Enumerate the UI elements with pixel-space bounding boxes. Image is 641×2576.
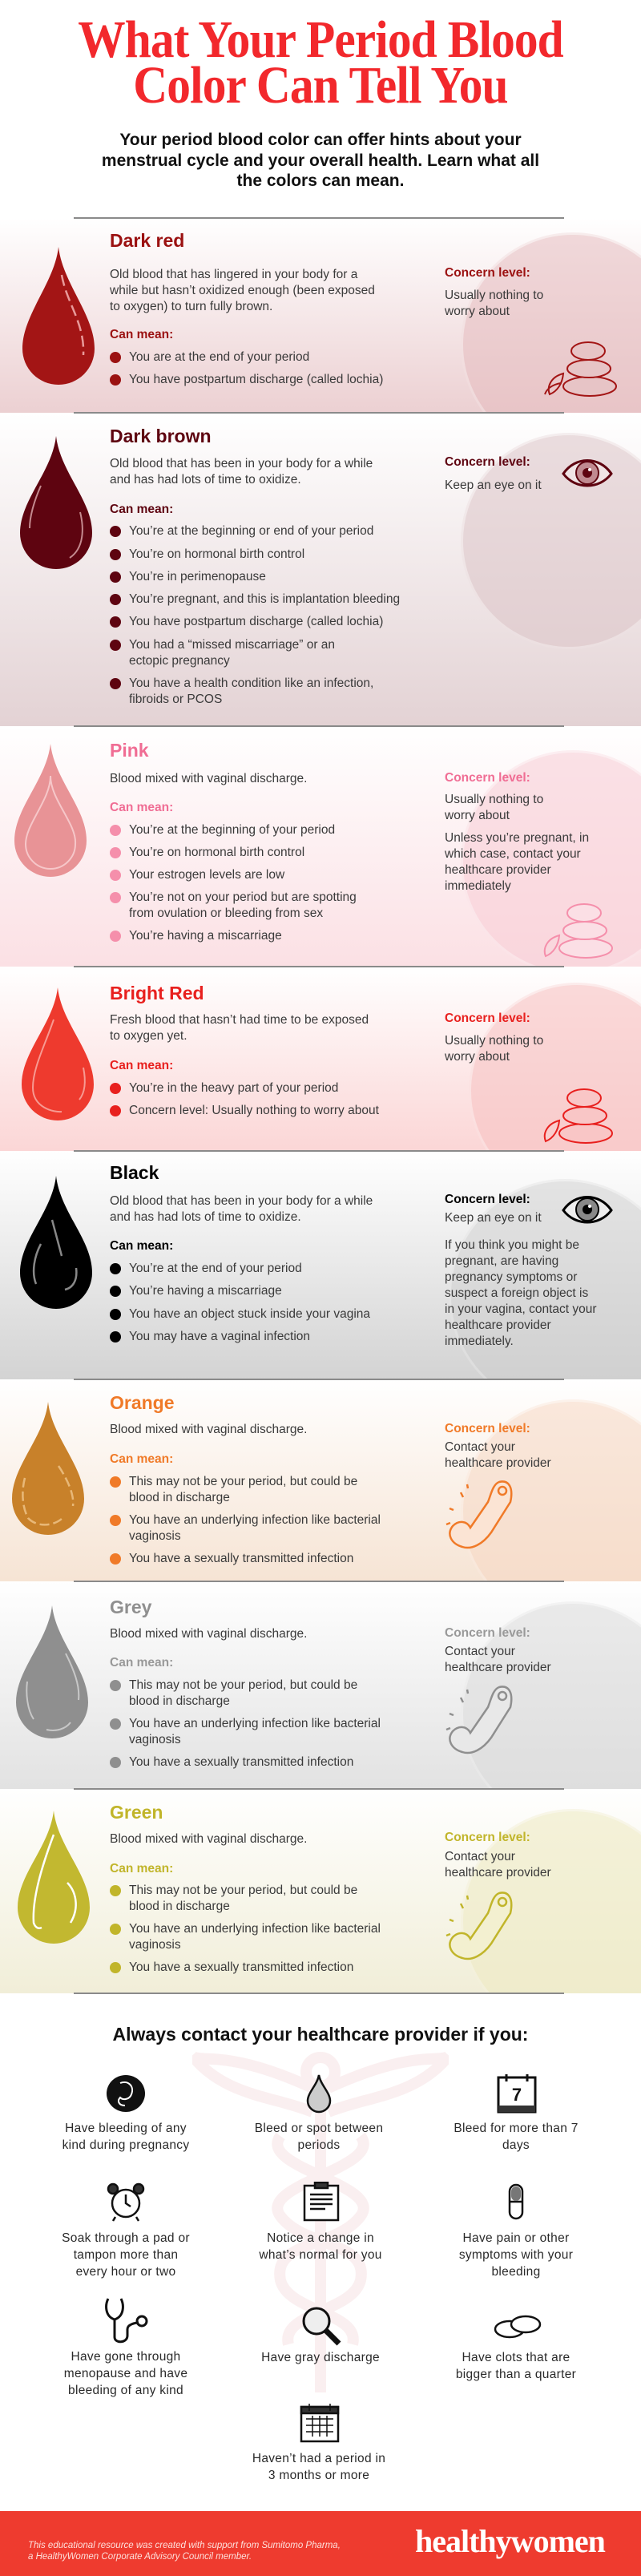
item: bleeding during pregnancy: Have bleeding of any: [65, 2122, 187, 2135]
item: clots: bigger than a quarter: [456, 2368, 576, 2381]
can mean list: Can mean:: [110, 1239, 173, 1253]
panel: bright red: [0, 967, 641, 1151]
icon: eye: [562, 1196, 613, 1223]
heading: Orange: [110, 1392, 175, 1413]
item: soak through pad: tampon more than: [74, 2248, 178, 2262]
subtitle: [102, 131, 539, 190]
concern level: Concern level:: [445, 266, 530, 280]
can mean list: You’re at the beginning or end of your period: [129, 524, 373, 538]
heading: Grey: [110, 1597, 151, 1617]
concern level: Concern level:: [445, 1831, 530, 1844]
description: Blood mixed with vaginal discharge.: [110, 772, 307, 785]
can mean list: blood in discharge: [129, 1900, 230, 1913]
item: gray discharge: Have gray discharge: [261, 2351, 380, 2364]
can mean list: You’re having a miscarriage: [129, 929, 282, 943]
can mean list: blood in discharge: [129, 1694, 230, 1708]
can mean list: [110, 503, 400, 706]
can mean list: fibroids or PCOS: [129, 692, 222, 706]
can mean list: This may not be your period, but could be: [129, 1475, 357, 1488]
title: Color Can Tell You: [133, 56, 508, 115]
can mean list: This may not be your period, but could be: [129, 1678, 357, 1692]
concern level: [445, 455, 613, 492]
can mean list: You have a sexually transmitted infection: [129, 1960, 353, 1974]
panel: green: [0, 1789, 641, 1993]
concern level: [445, 266, 543, 318]
description: Blood mixed with vaginal discharge.: [110, 1627, 307, 1641]
item: no period 3 months: [223, 2403, 415, 2483]
concern level: in your vagina, contact your: [445, 1302, 597, 1316]
icon: calendar 7: 7: [512, 2085, 522, 2105]
panel: orange: [0, 1379, 641, 1581]
item: menopause: Have gone through: [71, 2350, 180, 2364]
panel: dark brown: [0, 413, 641, 726]
concern level: Usually nothing to: [445, 1034, 543, 1048]
concern level: worry about: [445, 809, 510, 822]
concern level: Usually nothing to: [445, 289, 543, 302]
concern level: [445, 1831, 551, 1880]
icon: pill: [508, 2183, 524, 2220]
description: to oxygen yet.: [110, 1029, 187, 1043]
panel: grey: [0, 1581, 641, 1789]
concern level: Usually nothing to: [445, 793, 543, 806]
can mean list: You have a sexually transmitted infection: [129, 1755, 353, 1769]
item: soak through pad: Soak through a pad or: [62, 2231, 190, 2245]
item: pain or symptoms: bleeding: [491, 2265, 540, 2279]
can mean list: You have postpartum discharge (called lochia): [129, 373, 383, 386]
concern level: healthcare provider: [445, 1456, 551, 1470]
can mean list: vaginosis: [129, 1733, 181, 1746]
item: notice a change: [224, 2182, 417, 2262]
can mean list: Can mean:: [110, 1862, 173, 1875]
can mean list: Concern level: Usually nothing to worry about: [129, 1104, 379, 1117]
can mean list: You have postpartum discharge (called lochia): [129, 615, 383, 628]
icon: phone: [445, 1480, 513, 1548]
item: no period 3 months: 3 months or more: [268, 2469, 369, 2482]
concern level: [445, 1422, 551, 1470]
can mean list: You have an underlying infection like bacterial: [129, 1717, 381, 1730]
can mean list: Can mean:: [110, 503, 173, 516]
description: Old blood that has lingered in your body for a: [110, 268, 357, 281]
can mean list: Can mean:: [110, 1452, 173, 1466]
concern level: Contact your: [445, 1440, 515, 1454]
drop: dark red: [22, 247, 95, 385]
panel: black: [0, 1151, 641, 1379]
heading: Dark brown: [110, 426, 212, 446]
watermark: caduceus: [192, 2052, 449, 2392]
footer: [0, 2511, 641, 2576]
title: What Your Period Blood: [78, 10, 563, 69]
can mean list: You have an object stuck inside your vagina: [129, 1307, 370, 1321]
can mean list: [110, 1059, 379, 1117]
can mean list: You have a sexually transmitted infection: [129, 1552, 353, 1565]
icon: stones: [543, 1088, 613, 1144]
icon: stethoscope: [103, 2297, 148, 2345]
item: pain or symptoms: symptoms with your: [459, 2248, 573, 2262]
drop: bright red: [22, 987, 94, 1120]
icon: coins: [494, 2313, 542, 2340]
can mean list: [110, 1656, 381, 1769]
panel: pink: [0, 726, 641, 967]
can mean list: blood in discharge: [129, 1491, 230, 1504]
item: clots: [420, 2313, 612, 2377]
concern level: healthcare provider: [445, 1866, 551, 1880]
icon: eye: [562, 459, 613, 487]
can mean list: You’re pregnant, and this is implantation bleeding: [129, 592, 400, 606]
item: pain or symptoms: [420, 2182, 612, 2278]
concern level: pregnancy symptoms or: [445, 1270, 577, 1284]
can mean list: You’re on hormonal birth control: [129, 846, 304, 859]
icon: magnifier: [300, 2305, 342, 2347]
description: [110, 1194, 373, 1224]
drop: pink: [14, 744, 87, 877]
can mean list: Can mean:: [110, 801, 173, 814]
can mean list: Can mean:: [110, 1059, 173, 1072]
title: [78, 10, 563, 115]
item: pain or symptoms: Have pain or other: [463, 2231, 569, 2245]
concern level: Concern level:: [445, 455, 530, 469]
icon: stones: [544, 341, 617, 397]
item: menopause: bleeding of any kind: [68, 2384, 183, 2397]
concern level: [445, 1011, 543, 1064]
concern level: Keep an eye on it: [445, 1211, 542, 1225]
can mean list: You have an underlying infection like bacterial: [129, 1513, 381, 1527]
description: Old blood that has been in your body for a while: [110, 1194, 373, 1208]
concern level: [445, 1193, 613, 1348]
concern level: Concern level:: [445, 1422, 530, 1435]
drop: black: [20, 1176, 92, 1309]
drop: grey: [16, 1606, 88, 1738]
heading: Dark red: [110, 230, 184, 251]
concern level: Contact your: [445, 1645, 515, 1658]
description: [110, 457, 373, 487]
description: Blood mixed with vaginal discharge.: [110, 1423, 307, 1436]
can mean list: You’re in the heavy part of your period: [129, 1081, 338, 1095]
description: and has had lots of time to oxidize.: [110, 473, 301, 487]
item: menopause: menopause and have: [64, 2367, 187, 2380]
icon: stones: [543, 903, 613, 959]
description: and has had lots of time to oxidize.: [110, 1210, 301, 1224]
can mean list: You’re having a miscarriage: [129, 1284, 282, 1298]
footer note: a HealthyWomen Corporate Advisory Council member.: [28, 2552, 252, 2562]
heading: Green: [110, 1802, 163, 1823]
concern level: Keep an eye on it: [445, 478, 542, 492]
concern level: If you think you might be: [445, 1238, 579, 1252]
item: menopause: [30, 2297, 222, 2401]
description: Fresh blood that hasn’t had time to be exposed: [110, 1013, 369, 1027]
can mean list: [110, 1239, 370, 1343]
can mean list: from ovulation or bleeding from sex: [129, 906, 323, 920]
subtitle: Your period blood color can offer hints about your: [119, 131, 522, 149]
can mean list: You’re on hormonal birth control: [129, 547, 304, 561]
heading: always contact: Always contact your healthcare provider if you:: [113, 2024, 528, 2045]
concern level: Contact your: [445, 1850, 515, 1863]
icon: drop: [306, 2073, 332, 2114]
can mean list: You have an underlying infection like bacterial: [129, 1922, 381, 1936]
can mean list: [110, 1862, 381, 1974]
icon: clipboard: [303, 2182, 340, 2222]
item: notice a change: Notice a change in: [267, 2231, 374, 2245]
can mean list: You are at the end of your period: [129, 350, 309, 364]
can mean list: You have a health condition like an infection,: [129, 676, 373, 690]
can mean list: You may have a vaginal infection: [129, 1330, 310, 1343]
can mean list: You’re in perimenopause: [129, 570, 266, 583]
item: clots: Have clots that are: [462, 2351, 570, 2364]
concern level: which case, contact your: [445, 847, 581, 861]
concern level: immediately: [445, 879, 511, 893]
panel: dark red: [0, 218, 641, 413]
footer note: This educational resource was created with support from Sumitomo Pharma,: [28, 2541, 341, 2550]
can mean list: You’re at the beginning of your period: [129, 823, 335, 837]
concern level: suspect a foreign object is: [445, 1286, 588, 1300]
can mean list: Can mean:: [110, 1656, 173, 1670]
concern level: [445, 771, 589, 893]
concern level: Concern level:: [445, 1011, 530, 1025]
description: [110, 268, 375, 313]
icon: calendar 7: [497, 2073, 537, 2114]
concern level: pregnant, are having: [445, 1254, 558, 1268]
can mean list: [110, 1452, 381, 1565]
concern level: Concern level:: [445, 771, 530, 785]
concern level: healthcare provider: [445, 863, 551, 877]
concern level: worry about: [445, 1050, 510, 1064]
can mean list: vaginosis: [129, 1938, 181, 1952]
concern level: Concern level:: [445, 1626, 530, 1640]
item: bleed between periods: [223, 2073, 415, 2154]
heading: Black: [110, 1162, 159, 1183]
concern level: worry about: [445, 305, 510, 318]
can mean list: [110, 801, 357, 943]
can mean list: Can mean:: [110, 328, 173, 341]
description: Blood mixed with vaginal discharge.: [110, 1832, 307, 1846]
item: more than 7 days: Bleed for more than 7: [454, 2122, 579, 2135]
icon: calendar grid: [300, 2403, 340, 2443]
heading: Bright Red: [110, 983, 204, 1003]
drop: orange: [12, 1402, 84, 1535]
subtitle: the colors can mean.: [237, 172, 404, 190]
drop: green: [18, 1811, 90, 1944]
icon: fetus: [106, 2073, 146, 2114]
concern level: [445, 1626, 551, 1674]
logo: healthywomen: [415, 2523, 605, 2559]
subtitle: menstrual cycle and your overall health. Learn what all: [102, 151, 539, 170]
item: notice a change: what’s normal for you: [259, 2248, 382, 2262]
can mean list: ectopic pregnancy: [129, 654, 230, 668]
description: [110, 1013, 369, 1043]
concern level: immediately.: [445, 1334, 514, 1348]
item: more than 7 days: days: [502, 2138, 530, 2152]
can mean list: [110, 328, 383, 386]
can mean list: This may not be your period, but could be: [129, 1884, 357, 1897]
concern level: Unless you’re pregnant, in: [445, 831, 589, 845]
can mean list: You’re not on your period but are spotting: [129, 890, 357, 904]
item: bleed between periods: Bleed or spot between: [255, 2122, 383, 2135]
item: no period 3 months: Haven’t had a period in: [252, 2452, 385, 2465]
heading: Pink: [110, 740, 149, 761]
item: bleed between periods: periods: [298, 2138, 340, 2152]
item: bleeding during pregnancy: [62, 2075, 189, 2152]
icon: phone: [445, 1686, 513, 1754]
can mean list: vaginosis: [129, 1529, 181, 1543]
item: soak through pad: every hour or two: [76, 2265, 175, 2279]
can mean list: Your estrogen levels are low: [129, 868, 284, 882]
description: to oxygen) to turn fully brown.: [110, 300, 272, 313]
concern level: healthcare provider: [445, 1318, 551, 1332]
description: while but hasn’t oxidized enough (been exposed: [110, 284, 375, 297]
description: Old blood that has been in your body for a while: [110, 457, 373, 470]
can mean list: You had a “missed miscarriage” or an: [129, 638, 335, 652]
item: more than 7 days: [420, 2073, 612, 2154]
drop: dark brown: [20, 436, 92, 569]
footer note: [28, 2540, 341, 2562]
icon: phone: [445, 1892, 513, 1960]
concern level: Concern level:: [445, 1193, 530, 1206]
icon: alarm clock: [106, 2182, 146, 2222]
item: bleeding during pregnancy: kind during pregnancy: [62, 2138, 189, 2152]
item: soak through pad: [30, 2182, 222, 2278]
item: gray discharge: [224, 2305, 417, 2377]
concern level: healthcare provider: [445, 1661, 551, 1674]
can mean list: You’re at the end of your period: [129, 1262, 302, 1275]
